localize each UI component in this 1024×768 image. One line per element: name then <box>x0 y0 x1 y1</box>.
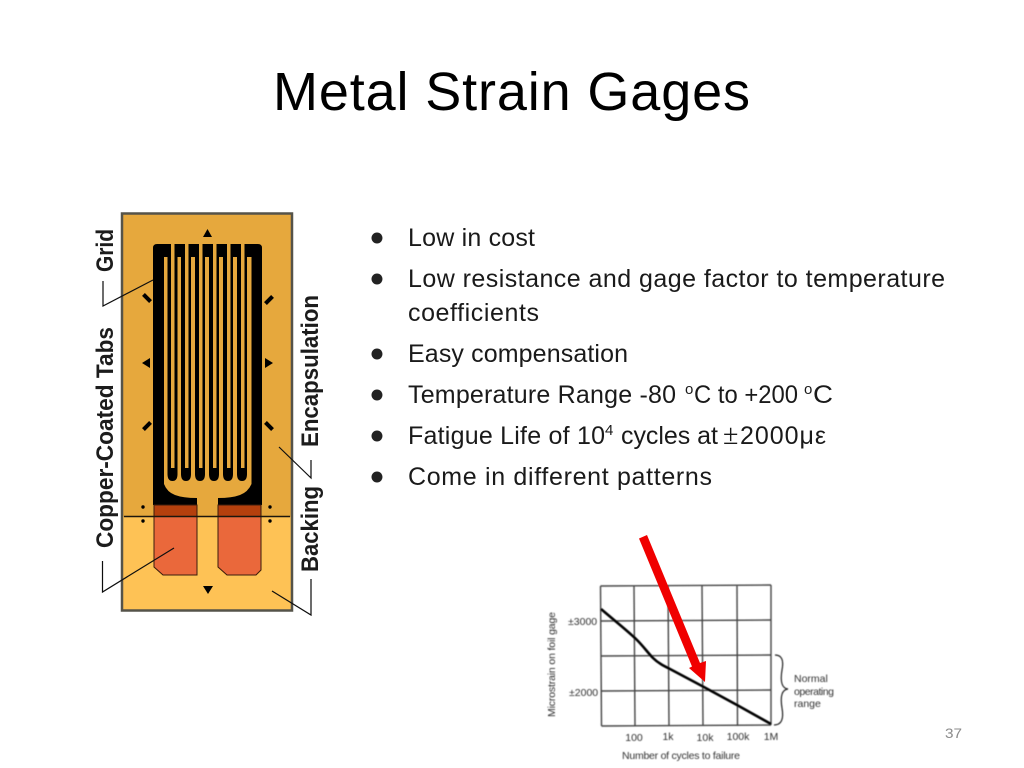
grid pattern <box>153 244 262 517</box>
range label <box>794 673 834 710</box>
gage outline <box>122 214 292 610</box>
leader lines <box>102 280 311 615</box>
neck lower <box>198 517 218 577</box>
alignment marks <box>141 229 274 594</box>
y axis label: Microstrain on foil gage <box>546 612 558 717</box>
bullet: fatigue life: Fatigue Life of 10 <box>408 422 605 450</box>
bullet list <box>372 224 945 491</box>
x axis label: Number of cycles to failure <box>622 750 740 762</box>
bullet: low resistance: coefficients <box>408 299 539 327</box>
label: backing: Backing <box>297 486 324 572</box>
copper tab: left <box>154 505 197 575</box>
bullet: easy compensation: Easy compensation <box>408 340 628 368</box>
x tick labels: 1M <box>764 731 778 743</box>
bullet: fatigue life <box>408 420 826 451</box>
chart grid <box>600 585 771 726</box>
x tick labels <box>625 731 778 744</box>
divider line <box>124 516 290 518</box>
bullet: temperature range: o <box>685 381 693 398</box>
bullet: low in cost: Low in cost <box>408 224 535 252</box>
strain gage diagram <box>92 214 324 615</box>
bullet: temperature range: o <box>804 381 812 398</box>
bullet: low resistance <box>408 265 945 327</box>
bullet markers <box>372 232 382 482</box>
title: Metal Strain Gages <box>273 62 750 122</box>
panel: encapsulation upper area <box>122 214 292 517</box>
bullet: fatigue life: cycles at <box>621 422 718 450</box>
bullet: low resistance: Low resistance and gage factor to temperature <box>408 265 945 293</box>
label: encapsulation: Encapsulation <box>297 295 324 447</box>
y tick labels: ±3000 <box>568 616 597 628</box>
x tick labels: 100k <box>727 731 750 743</box>
bullet: fatigue life: 4 <box>605 422 613 439</box>
range label: operating <box>794 686 834 698</box>
x tick labels: 1k <box>662 731 674 743</box>
y tick labels <box>568 616 598 699</box>
range label: Normal <box>794 673 828 685</box>
x tick labels: 10k <box>697 732 714 744</box>
range label: range <box>794 698 821 710</box>
bullet: temperature range <box>408 381 833 409</box>
red arrow <box>639 535 706 682</box>
label: grid: Grid <box>92 229 119 272</box>
bullet: temperature range: C to +200 <box>694 381 798 409</box>
x tick labels: 100 <box>625 732 643 744</box>
bullet: temperature range: C <box>813 381 833 409</box>
panel: backing lower area <box>122 517 292 610</box>
fatigue chart <box>546 585 834 762</box>
bullet: different patterns: Come in different patterns <box>408 463 712 491</box>
y tick labels: ±2000 <box>569 687 598 699</box>
brace: normal operating range <box>774 655 788 725</box>
bullet: fatigue life: 2000με <box>740 422 826 450</box>
copper tab: right <box>218 505 261 575</box>
fatigue curve <box>601 609 771 724</box>
bullet: fatigue life: ± <box>723 420 738 451</box>
page number: 37 <box>945 725 962 741</box>
label: copper-coated tabs: Copper-Coated Tabs <box>92 327 119 548</box>
bullet: temperature range: Temperature Range -80 <box>408 381 676 409</box>
